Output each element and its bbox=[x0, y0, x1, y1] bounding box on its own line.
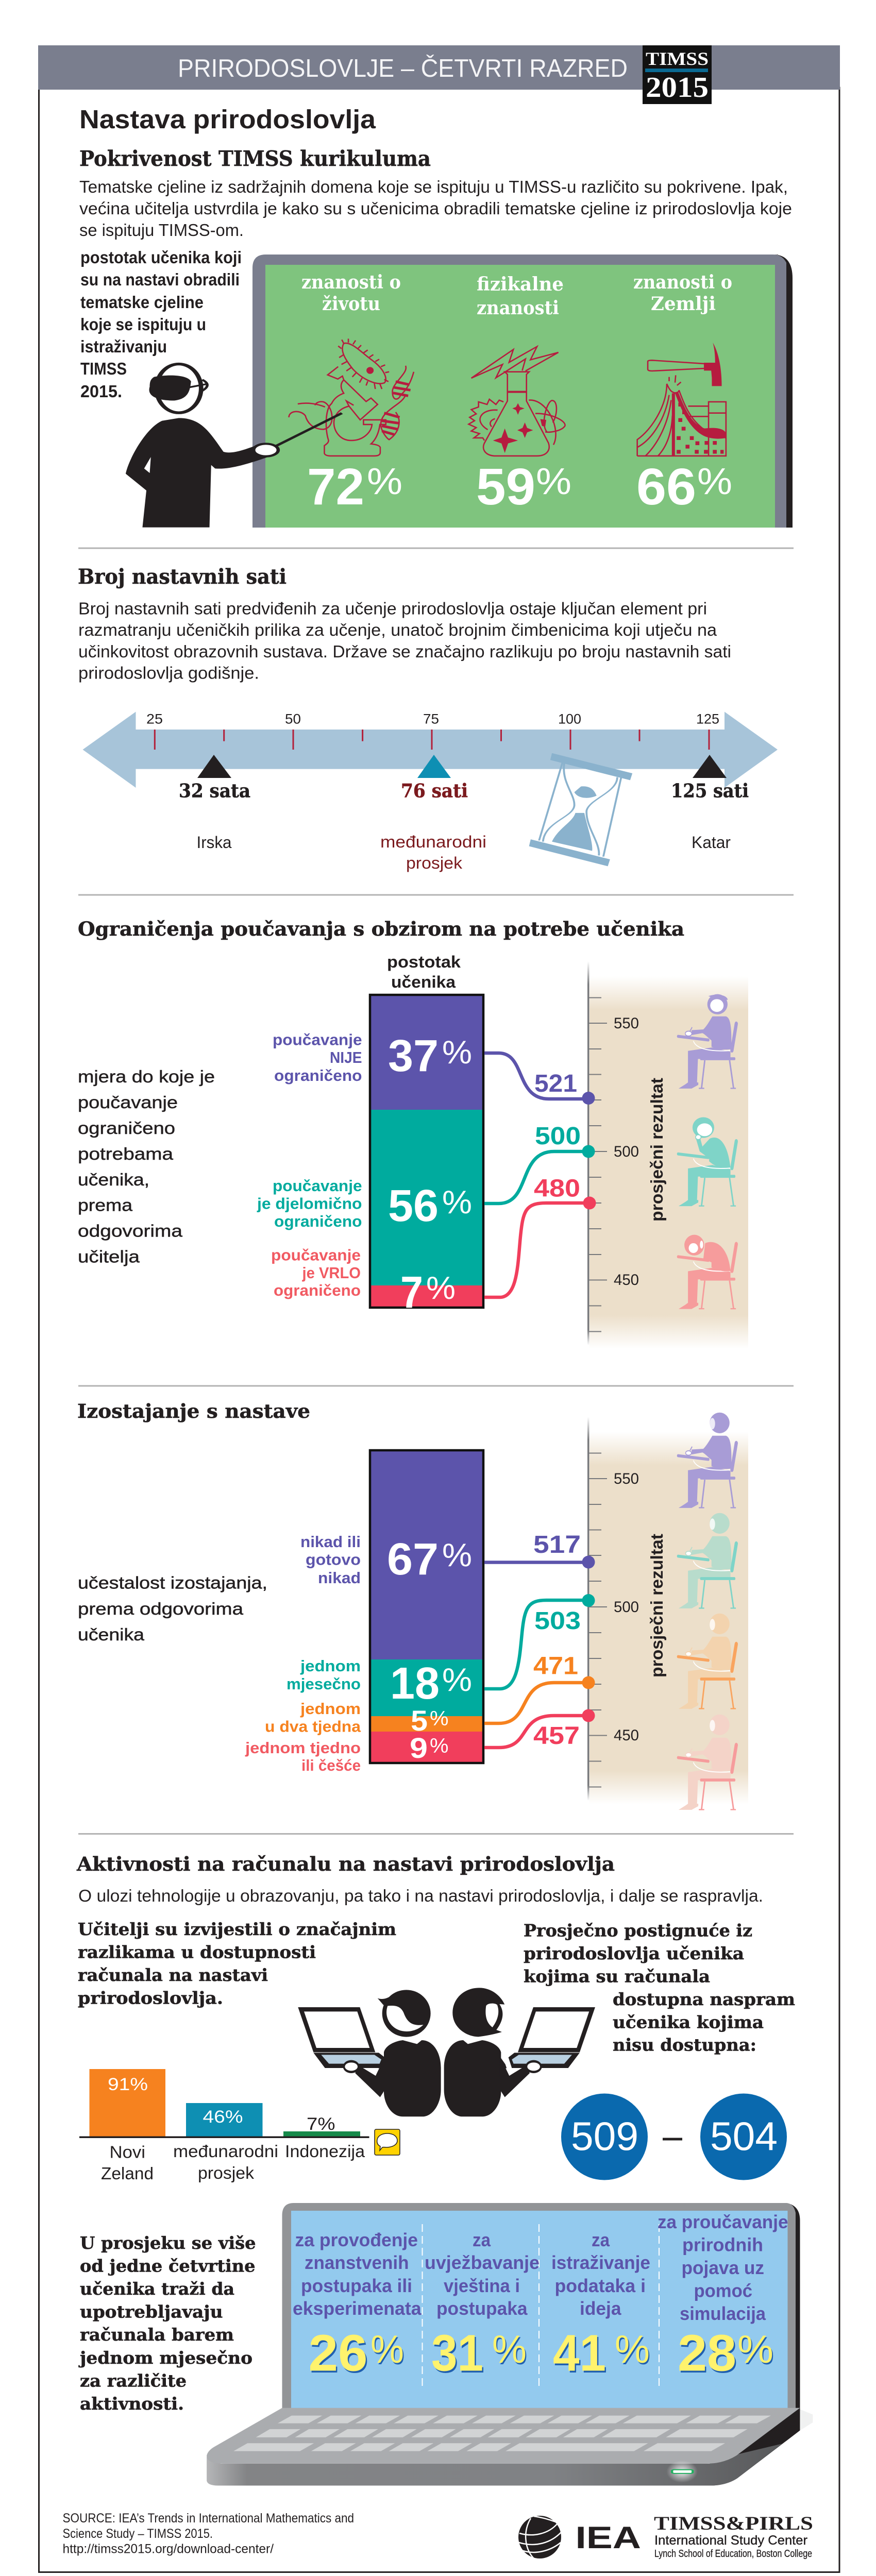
text block: teachers reported bbox=[78, 1919, 396, 2008]
labels: limitation categories: ograničeno bbox=[274, 1066, 362, 1084]
text block: more than a quarter: U prosjeku se više bbox=[80, 2233, 256, 2253]
laptop screen bbox=[291, 2211, 787, 2408]
label: life science: znanosti o bbox=[301, 272, 401, 293]
labels: limitation categories: ograničeno bbox=[274, 1281, 361, 1299]
screen dividers bbox=[423, 2224, 659, 2389]
logo: TIMSS &amp; PIRLS International Study Center bbox=[654, 2513, 813, 2560]
text block: instruction hours: učinkovitost obrazovnih sustava. Države se značajno razlikuju po broju nastavnih sati bbox=[78, 642, 731, 661]
activity: practising skills 31%: % bbox=[492, 2328, 527, 2371]
stat: 5%: % bbox=[430, 1707, 448, 1730]
activity: practising skills 31%: 31 bbox=[433, 2326, 484, 2384]
icon: student orange bbox=[678, 1614, 736, 1709]
activity: practising skills 31%: % bbox=[493, 2329, 528, 2373]
text block: coverage intro: se ispituju TIMSS-om. bbox=[79, 221, 244, 240]
labels: absence categories: mjesečno bbox=[287, 1675, 361, 1693]
activity: simulations 28%: 28 bbox=[679, 2326, 738, 2384]
marker: Katar 125 hours: Katar bbox=[692, 833, 731, 852]
activity: researching ideas 41%: istraživanje bbox=[551, 2252, 650, 2273]
text block: percent of students bbox=[80, 248, 242, 401]
text block: limitation measure: mjera do koje je bbox=[78, 1067, 215, 1086]
chart: stacked bar, limitation bbox=[370, 995, 483, 1317]
stat: 509 versus 504: 509 bbox=[571, 2113, 638, 2159]
text block: absence frequency: učestalost izostajanja, bbox=[78, 1573, 267, 1592]
marker: Irska 32 hours: 32 sata bbox=[179, 780, 250, 802]
text block: average achievement: nisu dostupna: bbox=[613, 2035, 756, 2055]
activity: experiments 26%: eksperimenata bbox=[293, 2298, 422, 2319]
text block: more than a quarter: od jedne četvrtine bbox=[80, 2256, 255, 2276]
divider bbox=[78, 894, 794, 895]
text block: more than a quarter bbox=[78, 2233, 256, 2414]
icon: student red bbox=[678, 1715, 736, 1810]
chart: computer availability bars: prosjek bbox=[198, 2163, 255, 2182]
chart: computer availability bars: međunarodni bbox=[173, 2142, 278, 2161]
activity: researching ideas 41%: 41 bbox=[553, 2325, 606, 2382]
activity: researching ideas 41%: za bbox=[592, 2229, 610, 2250]
laptop lid bbox=[786, 2203, 800, 2411]
label: physical science bbox=[477, 274, 564, 319]
text block: percent of students: TIMSS bbox=[80, 359, 127, 378]
source note bbox=[63, 2511, 354, 2556]
header title: PRIRODOSLOVLJE – ČETVRTI RAZRED bbox=[178, 55, 628, 82]
connector: 471 orange bbox=[484, 1653, 595, 1723]
activity: experiments 26%: % bbox=[370, 2328, 404, 2371]
stat: 18%: 18 bbox=[390, 1658, 440, 1708]
right student bbox=[444, 1988, 542, 2116]
panel: green chalkboard bbox=[252, 255, 793, 528]
text block: percent of students: postotak učenika koji bbox=[80, 248, 242, 267]
text block: more than a quarter: upotrebljavaju bbox=[80, 2302, 223, 2321]
marker: Katar 125 hours bbox=[671, 755, 749, 852]
source note: Science Study – TIMSS 2015. bbox=[63, 2527, 213, 2541]
chart: computer availability bars: Novi bbox=[109, 2142, 145, 2162]
text block: limitation measure: poučavanje bbox=[78, 1093, 178, 1112]
timeline arrow: 100 bbox=[558, 711, 581, 726]
logo: TIMSS 2015: 2015 bbox=[646, 72, 709, 104]
divider bbox=[78, 547, 794, 549]
marker: international average 76 hours: 76 sati bbox=[401, 780, 468, 802]
activity: simulations 28% bbox=[658, 2211, 788, 2384]
stat: 18%: % bbox=[442, 1662, 472, 1698]
chart: computer availability bars: 7% bbox=[307, 2114, 335, 2134]
activity: practising skills 31%: vještina i bbox=[444, 2275, 520, 2296]
text block: more than a quarter: jednom mjesečno bbox=[78, 2348, 252, 2368]
labels: limitation categories bbox=[257, 1030, 362, 1299]
icon: thinking student bbox=[678, 1117, 736, 1206]
text block: limitation measure: odgovorima bbox=[78, 1221, 183, 1241]
text block: more than a quarter: za različite bbox=[80, 2371, 187, 2391]
stat: 509 versus 504 bbox=[561, 2094, 787, 2180]
text block: average achievement bbox=[524, 1921, 795, 2055]
chart: computer availability bars bbox=[79, 2069, 369, 2183]
stat: 67%: 67 bbox=[387, 1534, 439, 1584]
stat: 66% bbox=[636, 458, 732, 516]
label: earth science bbox=[633, 272, 732, 315]
heading: absenteeism: Izostajanje s nastave bbox=[77, 1400, 310, 1422]
label: life science bbox=[301, 272, 401, 315]
panel: score axis with background: 550 bbox=[614, 1015, 639, 1032]
activity: researching ideas 41%: ideja bbox=[580, 2298, 621, 2319]
activity: experiments 26%: znanstvenih bbox=[305, 2252, 409, 2273]
heading: teaching limitations: Ograničenja poučavanja s obzirom na potrebe učenika bbox=[78, 918, 684, 940]
stat: 59%: % bbox=[536, 461, 571, 502]
activity: simulations 28%: % bbox=[737, 2328, 773, 2371]
activity: simulations 28%: % bbox=[738, 2329, 774, 2373]
labels: limitation categories: NIJE bbox=[330, 1048, 362, 1066]
labels: absence categories: nikad ili bbox=[300, 1533, 361, 1551]
labels: limitation categories: je djelomično bbox=[257, 1194, 362, 1213]
stat: 9%: % bbox=[430, 1735, 448, 1757]
stat: 59%: 59 bbox=[476, 458, 535, 516]
text block: instruction hours: Broj nastavnih sati predviđenih za učenje prirodoslovlja ostaje ključan element pri bbox=[78, 599, 707, 618]
connector: 480 red bbox=[484, 1175, 596, 1297]
heading: curriculum coverage: Pokrivenost TIMSS kurikuluma bbox=[79, 146, 431, 171]
logo: IEA globe bbox=[518, 2516, 641, 2558]
text block: teachers reported: Učitelji su izvijestili o značajnim bbox=[78, 1919, 396, 1939]
stat: 509 versus 504: 504 bbox=[710, 2113, 778, 2159]
activity: practising skills 31%: 31 bbox=[431, 2325, 483, 2382]
text block: average achievement: kojima su računala bbox=[524, 1966, 710, 1987]
connector: 480 red: 480 bbox=[534, 1175, 580, 1202]
panel: score axis with background: 450 bbox=[614, 1727, 639, 1744]
label: percent of students: postotak bbox=[387, 953, 461, 971]
stat: 56% bbox=[388, 1181, 472, 1231]
activity: experiments 26% bbox=[293, 2229, 422, 2384]
label: percent of students bbox=[387, 953, 461, 991]
label: life science: životu bbox=[322, 293, 380, 315]
timeline arrow: 25 bbox=[146, 711, 163, 726]
laptop keyboard base bbox=[207, 2408, 813, 2486]
connector: 503 teal: 503 bbox=[534, 1607, 581, 1635]
divider bbox=[78, 1385, 794, 1387]
activity: experiments 26%: 26 bbox=[310, 2326, 369, 2384]
connector: 517 purple: 517 bbox=[533, 1531, 581, 1558]
activity: practising skills 31%: uvježbavanje bbox=[425, 2252, 540, 2273]
logo: TIMSS &amp; PIRLS International Study Center: TIMSS&PIRLS bbox=[654, 2513, 813, 2534]
icon: attentive student bbox=[678, 994, 736, 1089]
activity: simulations 28%: pojava uz bbox=[681, 2257, 764, 2278]
labels: absence categories: jednom bbox=[300, 1700, 361, 1718]
labels: absence categories: nikad bbox=[318, 1569, 361, 1587]
connector: 521 purple: 521 bbox=[534, 1070, 577, 1097]
stat: 72%: % bbox=[367, 461, 402, 502]
axis title: prosječni rezultat bbox=[647, 1078, 666, 1222]
labels: limitation categories: ograničeno bbox=[274, 1212, 362, 1230]
connector: 500 teal: 500 bbox=[535, 1123, 581, 1150]
labels: absence categories bbox=[245, 1533, 361, 1774]
axis ticks bbox=[155, 730, 709, 750]
text block: average achievement: Prosječno postignuće iz bbox=[524, 1921, 752, 1940]
timeline arrow: 75 bbox=[423, 711, 439, 726]
logo: TIMSS 2015: TIMSS bbox=[646, 48, 709, 69]
text block: teachers reported: razlikama u dostupnosti bbox=[78, 1942, 316, 1962]
marker: Katar 125 hours: 125 sati bbox=[671, 780, 749, 802]
stat: 7%: 7 bbox=[400, 1267, 423, 1317]
labels: absence categories: jednom tjedno bbox=[245, 1739, 361, 1757]
text block: more than a quarter: učenika traži da bbox=[80, 2279, 234, 2299]
header banner bbox=[38, 45, 840, 90]
text block: limitation measure: učitelja bbox=[78, 1247, 140, 1266]
timeline arrow: 50 bbox=[285, 711, 301, 726]
icon: geological hammer and volcano bbox=[637, 343, 726, 456]
panel: score axis with background: 450 bbox=[614, 1272, 639, 1289]
stat: 37%: 37 bbox=[388, 1031, 439, 1081]
text block: limitation measure: ograničeno bbox=[78, 1118, 175, 1138]
text block: percent of students: tematske cjeline bbox=[80, 293, 204, 312]
activity: simulations 28%: 28 bbox=[678, 2325, 736, 2382]
label: percent of students: učenika bbox=[391, 973, 456, 991]
source note: http://timss2015.org/download-center/ bbox=[63, 2542, 274, 2556]
activity: simulations 28%: simulacija bbox=[680, 2303, 766, 2324]
chart: computer availability bars: Indonezija bbox=[285, 2142, 365, 2161]
activity: experiments 26%: % bbox=[372, 2329, 405, 2373]
stat: 67% bbox=[387, 1534, 472, 1584]
label: earth science: Zemlji bbox=[651, 293, 716, 315]
stat: 37% bbox=[388, 1031, 472, 1081]
marker: international average 76 hours: prosjek bbox=[406, 854, 463, 872]
activity: researching ideas 41%: % bbox=[616, 2329, 651, 2373]
stat: 37%: % bbox=[442, 1035, 472, 1071]
text block: coverage intro: Tematske cjeline iz sadržajnih domena koje se ispituju u TIMSS-u različito su pokrivene. Ipak, bbox=[79, 177, 788, 196]
panel: score axis with background bbox=[587, 1417, 748, 1804]
activity: experiments 26%: postupaka ili bbox=[301, 2275, 412, 2296]
left laptop bbox=[298, 2007, 385, 2068]
text block: limitation measure: potrebama bbox=[78, 1144, 174, 1163]
activity: experiments 26%: za provođenje bbox=[295, 2229, 418, 2250]
activity: simulations 28%: za proučavanje bbox=[658, 2211, 788, 2232]
stat: 7% bbox=[400, 1267, 456, 1317]
text block: more than a quarter: računala barem bbox=[80, 2325, 234, 2345]
stat: 18% bbox=[390, 1658, 472, 1708]
text block: percent of students: 2015. bbox=[80, 382, 122, 401]
logo: TIMSS 2015 bbox=[643, 45, 712, 104]
text block: limitation measure bbox=[78, 1067, 215, 1266]
stat: 56%: 56 bbox=[388, 1181, 439, 1231]
icon: two students with laptops bbox=[298, 1988, 595, 2116]
activity: practising skills 31%: za bbox=[473, 2229, 491, 2250]
text block: teachers reported: računala na nastavi bbox=[78, 1965, 268, 1985]
chart: stacked bar, absenteeism bbox=[370, 1450, 483, 1764]
heading: instruction hours: Broj nastavnih sati bbox=[78, 565, 287, 589]
chart: computer availability bars: Zeland bbox=[101, 2164, 154, 2183]
divider bbox=[78, 1833, 794, 1835]
text block: absence frequency: prema odgovorima bbox=[78, 1599, 244, 1618]
left student bbox=[343, 1990, 441, 2116]
timeline arrow bbox=[82, 711, 778, 788]
connector: 457 red bbox=[484, 1709, 595, 1750]
chart: computer availability bars: 91% bbox=[108, 2075, 148, 2094]
marker: Irska 32 hours bbox=[179, 755, 250, 852]
stat: 9% bbox=[410, 1732, 448, 1764]
stat: 66%: % bbox=[697, 461, 732, 502]
marker: Irska 32 hours: Irska bbox=[197, 833, 232, 852]
activity: practising skills 31%: postupaka bbox=[436, 2298, 528, 2319]
icon: student purple bbox=[678, 1413, 736, 1508]
activity: practising skills 31% bbox=[425, 2229, 540, 2384]
icon: hourglass bbox=[529, 753, 632, 866]
panel: score axis with background bbox=[587, 961, 748, 1349]
source note: SOURCE: IEA’s Trends in International Mathematics and bbox=[63, 2511, 354, 2526]
text block: coverage intro: većina učitelja ustvrdila je kako su s učenicima obradili tematske cjeline iz prirodoslovlja koje bbox=[79, 199, 792, 218]
icon: microscope, bacterium and DNA bbox=[289, 338, 414, 456]
icon: laptop with activity stats bbox=[207, 2203, 813, 2486]
logo: TIMSS &amp; PIRLS International Study Center: Lynch School of Education, Boston College bbox=[654, 2548, 812, 2560]
icon: flask, gear, atom and lightning bbox=[468, 347, 565, 456]
stat: 5% bbox=[411, 1704, 448, 1737]
panel: score axis with background: 500 bbox=[614, 1599, 639, 1616]
text block: instruction hours: razmatranju učeničkih prilika za učenje, unatoč brojnim čimbenicima koji utječu na bbox=[78, 620, 717, 639]
heading: computer activities: Aktivnosti na računalu na nastavi prirodoslovlja bbox=[76, 1853, 615, 1875]
label: earth science: znanosti o bbox=[633, 272, 732, 293]
connector: 517 purple bbox=[484, 1531, 595, 1568]
connector: 457 red: 457 bbox=[533, 1722, 580, 1750]
activity: researching ideas 41%: % bbox=[615, 2328, 650, 2371]
panel: score axis with background: 550 bbox=[614, 1470, 639, 1487]
text block: computer intro: O ulozi tehnologije u obrazovanju, pa tako i na nastavi prirodoslovlja, i dalje se raspravlja. bbox=[78, 1886, 763, 1905]
stat: 59% bbox=[476, 458, 571, 516]
stat: 67%: % bbox=[442, 1537, 472, 1573]
title: Nastava prirodoslovlja bbox=[79, 105, 376, 134]
logo: IEA globe: IEA bbox=[575, 2520, 641, 2555]
labels: limitation categories: je VRLO bbox=[302, 1264, 361, 1282]
text block: instruction hours: prirodoslovlja godišnje. bbox=[78, 664, 259, 682]
icon: discouraged student bbox=[678, 1235, 736, 1309]
text block: percent of students: istraživanju bbox=[80, 337, 167, 356]
activity: simulations 28%: pomoć bbox=[694, 2280, 752, 2301]
stat: 5%: 5 bbox=[411, 1704, 428, 1737]
text block: absence frequency: učenika bbox=[78, 1625, 145, 1644]
logo: TIMSS &amp; PIRLS International Study Center: International Study Center bbox=[654, 2533, 807, 2548]
labels: absence categories: ili češće bbox=[301, 1756, 361, 1774]
stat: 66%: 66 bbox=[636, 458, 696, 516]
labels: limitation categories: poučavanje bbox=[273, 1177, 362, 1195]
panel: score axis with background: 500 bbox=[614, 1143, 639, 1160]
connector: 521 purple bbox=[484, 1053, 595, 1105]
text block: limitation measure: učenika, bbox=[78, 1170, 149, 1189]
stat: 7%: % bbox=[426, 1270, 456, 1306]
labels: absence categories: jednom bbox=[300, 1657, 361, 1675]
activity: researching ideas 41%: 41 bbox=[554, 2326, 607, 2384]
text block: percent of students: su na nastavi obradili bbox=[80, 270, 240, 289]
timeline arrow: 125 bbox=[696, 711, 719, 726]
text block: instruction hours bbox=[78, 599, 731, 682]
activity: experiments 26%: 26 bbox=[308, 2325, 368, 2382]
text block: more than a quarter: aktivnosti. bbox=[80, 2394, 184, 2414]
text block: average achievement: dostupna naspram bbox=[613, 1989, 795, 2009]
text block: coverage intro bbox=[79, 177, 792, 240]
labels: limitation categories: poučavanje bbox=[271, 1246, 361, 1264]
stat: 9%: 9 bbox=[410, 1732, 428, 1764]
stat: 72%: 72 bbox=[307, 458, 364, 516]
text block: percent of students: koje se ispituju u bbox=[80, 315, 206, 334]
stat: 56%: % bbox=[442, 1184, 472, 1221]
right laptop bbox=[509, 2007, 595, 2068]
label: physical science: znanosti bbox=[477, 297, 559, 319]
marker: international average 76 hours bbox=[380, 755, 486, 872]
text block: limitation measure: prema bbox=[78, 1195, 133, 1215]
marker: international average 76 hours: međunarodni bbox=[380, 833, 486, 851]
activity: researching ideas 41% bbox=[551, 2229, 651, 2384]
text block: average achievement: učenika kojima bbox=[613, 2012, 764, 2032]
connector: 471 orange: 471 bbox=[533, 1653, 578, 1680]
label: physical science: fizikalne bbox=[477, 274, 564, 295]
chart: computer availability bars: 46% bbox=[203, 2107, 243, 2127]
connector: 500 teal bbox=[484, 1123, 595, 1204]
axis title: prosječni rezultat bbox=[647, 1534, 666, 1677]
text block: teachers reported: prirodoslovlja. bbox=[78, 1988, 223, 2008]
text block: average achievement: prirodoslovlja učenika bbox=[524, 1943, 744, 1963]
labels: absence categories: u dva tjedna bbox=[265, 1718, 361, 1735]
connector: 503 teal bbox=[484, 1594, 595, 1689]
icon: teacher with pointer bbox=[126, 364, 342, 528]
activity: researching ideas 41%: podataka i bbox=[554, 2275, 646, 2296]
text block: absence frequency bbox=[78, 1573, 267, 1644]
icon: student teal bbox=[678, 1513, 736, 1608]
labels: absence categories: gotovo bbox=[306, 1551, 361, 1568]
icon: speech bubble note bbox=[375, 2129, 400, 2155]
labels: limitation categories: poučavanje bbox=[273, 1030, 362, 1049]
stat: 72% bbox=[307, 458, 402, 516]
activity: simulations 28%: prirodnih bbox=[682, 2234, 763, 2256]
